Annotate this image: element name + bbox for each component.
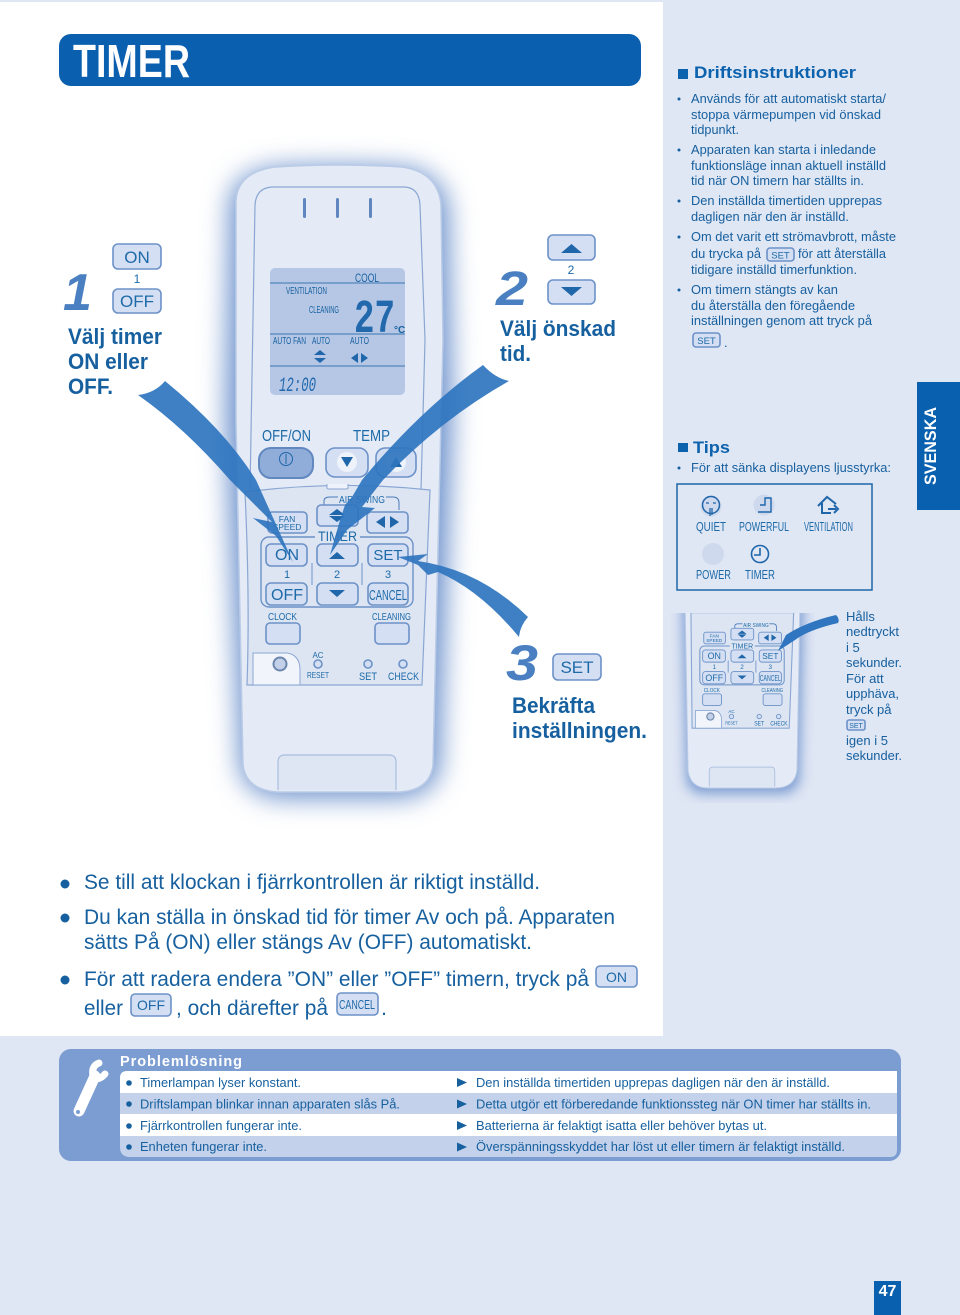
troubleshooting rows: Driftslampan blinkar innan apparaten slås På. — [140, 1098, 400, 1112]
bullet list: notes: Du kan ställa in önskad tid för timer Av och på. Apparaten — [84, 905, 615, 929]
hold SET note: i 5 — [846, 640, 860, 655]
lower control panel: CANCEL — [369, 587, 407, 604]
troubleshooting rows: Överspänningsskyddet har löst ut eller timern är felaktigt inställd. — [476, 1140, 845, 1154]
troubleshooting rows: Enheten fungerar inte. — [140, 1140, 267, 1154]
title bar: TIMER — [73, 35, 190, 87]
step 3: SET — [560, 658, 594, 677]
small remote illustration: FAN — [710, 634, 719, 639]
bullet list: notes: . — [381, 996, 387, 1020]
step 3: 3 — [506, 635, 538, 691]
hold SET note — [846, 609, 902, 763]
operating instructions text: . — [724, 335, 728, 350]
lower control panel: OFF — [271, 587, 303, 604]
hold SET note: sekunder. — [846, 655, 902, 670]
power and temp buttons — [259, 428, 416, 478]
hold SET note: sekunder. — [846, 748, 902, 763]
LCD display: AUTO — [350, 335, 369, 347]
step 1: ON — [124, 248, 150, 267]
operating instructions text: SET — [771, 250, 790, 262]
lower control panel: 3 — [385, 569, 391, 581]
LCD display: 27 — [354, 294, 395, 347]
small remote illustration: 3 — [769, 664, 773, 671]
title bar — [59, 34, 641, 87]
lower control panel: 2 — [334, 569, 340, 581]
step 2: tid. — [500, 341, 531, 366]
lower control panel: FAN — [279, 514, 295, 524]
small remote illustration: 2 — [740, 664, 744, 671]
LCD display: 12:00 — [279, 375, 316, 398]
troubleshooting rows: Fjärrkontrollen fungerar inte. — [140, 1119, 302, 1133]
small remote illustration: SET — [754, 720, 764, 727]
icon: ventilation — [818, 497, 838, 513]
step 2: 2 — [568, 263, 575, 277]
troubleshooting rows — [120, 1071, 897, 1157]
LCD display: °C — [394, 325, 405, 336]
lower control panel: CLOCK — [268, 611, 297, 623]
icon: power lamp — [702, 543, 724, 565]
lower control panel — [245, 484, 430, 685]
step 2: 2 — [495, 263, 528, 316]
operating instructions text: Om det varit ett strömavbrott, måste — [691, 229, 896, 244]
operating instructions text: Apparaten kan starta i inledande — [691, 142, 876, 157]
power and temp buttons: OFF/ON — [262, 428, 311, 445]
troubleshooting rows: Timerlampan lyser konstant. — [140, 1076, 301, 1090]
power and temp buttons: TEMP — [353, 428, 390, 445]
operating instructions text: Den inställda timertiden upprepas — [691, 193, 882, 208]
step 3: inställningen. — [512, 718, 647, 743]
operating instructions text: du återställa den föregående — [691, 298, 855, 313]
small arrow to SET — [778, 615, 839, 651]
troubleshooting rows: Detta utgör ett förberedande funktionssteg när ON timer har ställts in. — [476, 1098, 871, 1112]
arrow to ON/OFF — [138, 381, 293, 562]
lower control panel: AIR SWING — [339, 494, 385, 506]
operating instructions text: Om timern stängts av kan — [691, 282, 838, 297]
tips text: För att sänka displayens ljusstyrka: — [691, 460, 891, 475]
step 1: 1 — [134, 272, 141, 286]
operating instructions text: funktionsläge innan aktuell inställd — [691, 158, 886, 173]
small remote illustration — [682, 600, 804, 794]
operating instructions text: inställningen genom att tryck på — [691, 313, 873, 328]
hold SET note: SET — [849, 723, 864, 730]
remote control illustration — [226, 165, 452, 798]
lower control panel: TIMER — [318, 529, 357, 544]
indoor unit indicator panel: TIMER — [745, 568, 775, 582]
arrow to up/down — [330, 365, 509, 555]
bullet list: notes: För att radera endera ”ON” eller ”OFF” timern, tryck på — [84, 967, 589, 991]
slits — [303, 198, 372, 218]
step 1: ON eller — [68, 349, 148, 374]
small remote illustration: TIMER — [731, 641, 754, 650]
LCD display: AUTO — [312, 335, 330, 347]
step 1: 1 — [63, 264, 92, 322]
small remote illustration: CLEANING — [761, 688, 783, 694]
operating instructions text: för att återställa — [798, 246, 887, 261]
operating instructions text — [678, 91, 896, 350]
small remote illustration: 1 — [713, 664, 717, 671]
lower control panel: CLEANING — [372, 611, 411, 623]
operating instructions text: stoppa värmepumpen vid önskad — [691, 107, 881, 122]
bullet list: notes: OFF — [137, 997, 165, 1013]
operating instructions text: SET — [697, 336, 716, 347]
indoor unit indicator panel — [677, 484, 872, 590]
bullet list: notes: sätts På (ON) eller stängs Av (OFF) automatiskt. — [84, 930, 532, 954]
heading: Driftsinstruktioner: Driftsinstruktioner — [694, 64, 857, 82]
indoor unit indicator panel: POWER — [696, 568, 731, 582]
panel: white main area — [0, 2, 663, 1036]
small remote illustration: RESET — [725, 720, 738, 725]
icon: timer clock — [752, 546, 768, 562]
hold SET note: tryck på — [846, 702, 892, 717]
hold SET note: För att — [846, 671, 884, 686]
LCD display: COOL — [355, 273, 379, 285]
bullet list: notes: , och därefter på — [176, 996, 328, 1020]
indoor unit indicator panel: VENTILATION — [804, 520, 853, 534]
LCD display: CLEANING — [309, 304, 339, 316]
operating instructions text: tidigare inställd timerfunktion. — [691, 262, 857, 277]
bullet list: notes: Se till att klockan i fjärrkontrollen är riktigt inställd. — [84, 870, 540, 894]
language tab — [917, 382, 960, 510]
troubleshooting rows: Den inställda timertiden upprepas dagligen när den är inställd. — [476, 1076, 830, 1090]
small remote illustration: AIR SWING — [743, 623, 769, 629]
operating instructions text: tidpunkt. — [691, 122, 739, 137]
step 1: OFF. — [68, 374, 113, 399]
icon: wrench — [76, 1063, 105, 1114]
lower control panel: SET — [373, 547, 403, 564]
language tab: SVENSKA — [922, 407, 940, 485]
panel: troubleshooting: Problemlösning — [120, 1054, 242, 1070]
operating instructions text: Används för att automatiskt starta/ — [691, 91, 886, 106]
hold SET note: upphäva, — [846, 686, 899, 701]
step 2 — [495, 235, 616, 366]
operating instructions text: tid när ON timern har ställts in. — [691, 173, 864, 188]
bullet list: notes — [60, 870, 637, 1020]
hold SET note: nedtryckt — [846, 624, 899, 639]
lower control panel: SPEED — [273, 522, 301, 532]
small remote illustration: CANCEL — [760, 673, 781, 683]
lower control panel: AC — [312, 651, 324, 660]
bullet list: notes: CANCEL — [339, 997, 375, 1012]
step 3 — [506, 635, 647, 743]
step 1: OFF — [120, 292, 154, 311]
small remote illustration: SET — [762, 651, 778, 661]
lower control panel: RESET — [307, 670, 329, 680]
small remote illustration: SPEED — [706, 638, 723, 643]
lower control panel: 1 — [284, 569, 290, 581]
bullet list: notes: ON — [606, 969, 627, 985]
small remote illustration: ON — [708, 651, 721, 661]
small remote illustration: CHECK — [770, 720, 788, 727]
lower control panel: ON — [275, 547, 299, 564]
LCD display: VENTILATION — [286, 285, 327, 297]
operating instructions text: du trycka på — [691, 246, 762, 261]
LCD display — [270, 268, 405, 398]
small remote illustration: CLOCK — [704, 688, 720, 694]
operating instructions text: dagligen när den är inställd. — [691, 209, 849, 224]
page number: 47 — [879, 1283, 896, 1300]
heading: Tips — [678, 438, 730, 457]
panel: troubleshooting — [59, 1049, 901, 1161]
battery door — [278, 755, 396, 790]
step 1: Välj timer — [68, 324, 162, 349]
page number — [874, 1281, 901, 1315]
indoor unit indicator panel: POWERFUL — [739, 520, 789, 534]
hold SET note: Hålls — [846, 609, 875, 624]
lower control panel: CHECK — [388, 671, 420, 683]
heading: Tips: Tips — [693, 438, 730, 457]
troubleshooting rows: Batterierna är felaktigt isatta eller behöver bytas ut. — [476, 1119, 767, 1133]
indoor unit indicator panel: QUIET — [696, 520, 726, 534]
LCD display: AUTO FAN — [273, 335, 306, 347]
step 3: Bekräfta — [512, 693, 596, 718]
small remote illustration: AC — [728, 709, 735, 714]
hold SET note: igen i 5 — [846, 733, 888, 748]
icon: quiet — [700, 496, 722, 516]
bullet list: notes: eller — [84, 996, 123, 1020]
small remote illustration: OFF — [705, 673, 724, 683]
icon: powerful — [754, 494, 774, 516]
arrow to SET — [398, 554, 528, 637]
lower control panel: SET — [359, 671, 377, 683]
step 1 — [63, 244, 162, 399]
step 2: Välj önskad — [500, 316, 616, 341]
